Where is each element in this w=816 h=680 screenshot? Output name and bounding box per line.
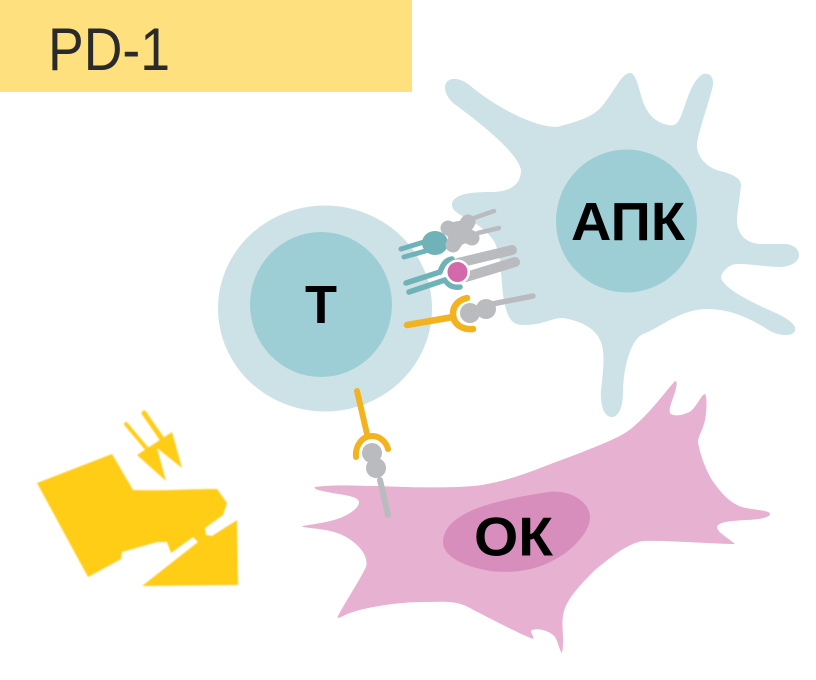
header banner — [0, 0, 412, 92]
icon: lightning marks — [126, 413, 182, 481]
APC nucleus — [556, 150, 697, 292]
T label: Т — [305, 275, 337, 335]
OK cell — [302, 381, 770, 653]
APC cell — [445, 73, 799, 417]
title: PD-1 — [48, 16, 170, 83]
T cell — [218, 206, 432, 412]
receptor pair: bottom yellow and gray — [356, 391, 388, 515]
receptor pair: teal and pink ligand — [406, 250, 515, 292]
receptor pair: yellow and gray — [407, 296, 533, 329]
icon: yellow foot and wedge — [37, 413, 238, 586]
T nucleus — [250, 232, 392, 377]
APC label: АПК — [571, 192, 686, 252]
receptor pair: teal and gray cross — [401, 211, 499, 257]
OK nucleus — [443, 492, 590, 572]
OK label: ОК — [474, 506, 553, 568]
